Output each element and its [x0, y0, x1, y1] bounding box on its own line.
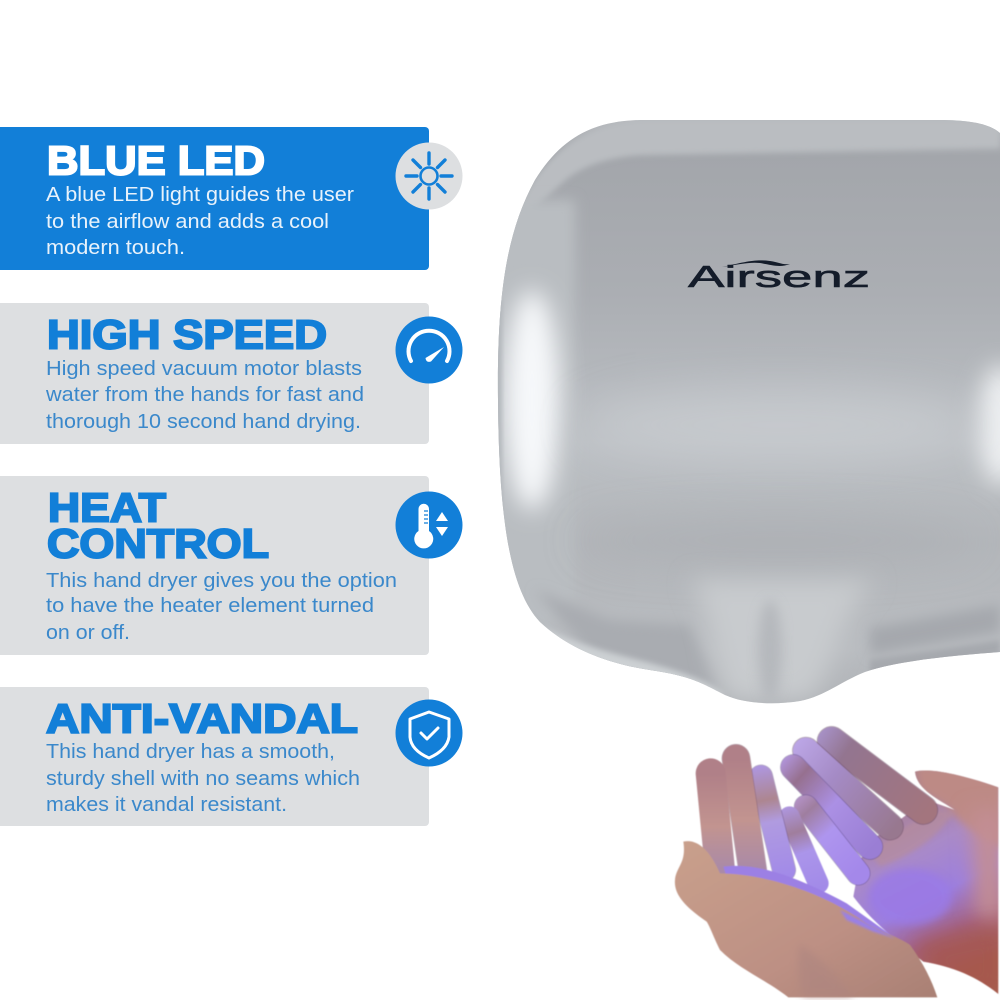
text: blue LED description: modern touch.: [46, 236, 185, 259]
text: anti-vandal description: sturdy shell with no seams which: [46, 767, 360, 790]
text: heat control description: [46, 569, 397, 644]
text: anti-vandal description: This hand dryer has a smooth,: [46, 740, 335, 763]
panel: blue LED: [0, 127, 462, 270]
text: blue LED description: [46, 183, 354, 259]
icon: sun: [396, 142, 462, 210]
panel: high speed: [0, 303, 462, 444]
text: anti-vandal description: [46, 740, 360, 816]
icon: shield: [396, 700, 462, 766]
text: anti-vandal description: makes it vandal resistant.: [46, 793, 287, 816]
panel: anti-vandal: [0, 687, 462, 826]
text: heat control description: This hand dryer gives you the option: [46, 569, 397, 592]
text: heat control description: on or off.: [46, 621, 130, 644]
heading: blue LED: BLUE LED: [47, 138, 265, 184]
left hand thumb and back: [675, 841, 937, 997]
logo: Airsenz: Airsenz: [688, 259, 870, 294]
heading: heat control: CONTROL: [47, 520, 269, 566]
icon: thermometer: [396, 492, 462, 558]
text: heat control description: to have the heater element turned: [46, 594, 374, 617]
heading: high speed: HIGH SPEED: [47, 312, 327, 358]
text: blue LED description: to the airflow and adds a cool: [46, 210, 329, 233]
heading: heat control: [47, 484, 269, 566]
shell mid sheen: [626, 392, 934, 446]
right hand fingers: [793, 741, 923, 873]
shell lower bevel: [548, 598, 708, 685]
heading: heat control: HEAT: [48, 484, 166, 530]
heading: anti-vandal: ANTI-VANDAL: [46, 696, 358, 742]
text: high speed description: thorough 10 second hand drying.: [46, 410, 361, 433]
right hand palm and thumb: [847, 767, 1000, 1000]
icon: speedometer: [396, 316, 462, 384]
text: high speed description: [45, 357, 364, 433]
left hand purple palm: [723, 866, 893, 937]
logo: Airsenz: [688, 259, 870, 294]
shell top band: [526, 120, 1000, 202]
left hand fingers: [711, 758, 818, 883]
photo: hands under blue light: [675, 741, 1000, 1000]
text: high speed description: water from the hands for fast and: [45, 383, 364, 406]
text: blue LED description: A blue LED light guides the user: [46, 183, 354, 206]
shell right highlight: [978, 365, 1000, 485]
shell left bevel: [498, 198, 576, 624]
hand dryer: [488, 115, 1000, 710]
panel: heat control: [0, 476, 462, 655]
text: high speed description: High speed vacuum motor blasts: [46, 357, 362, 380]
